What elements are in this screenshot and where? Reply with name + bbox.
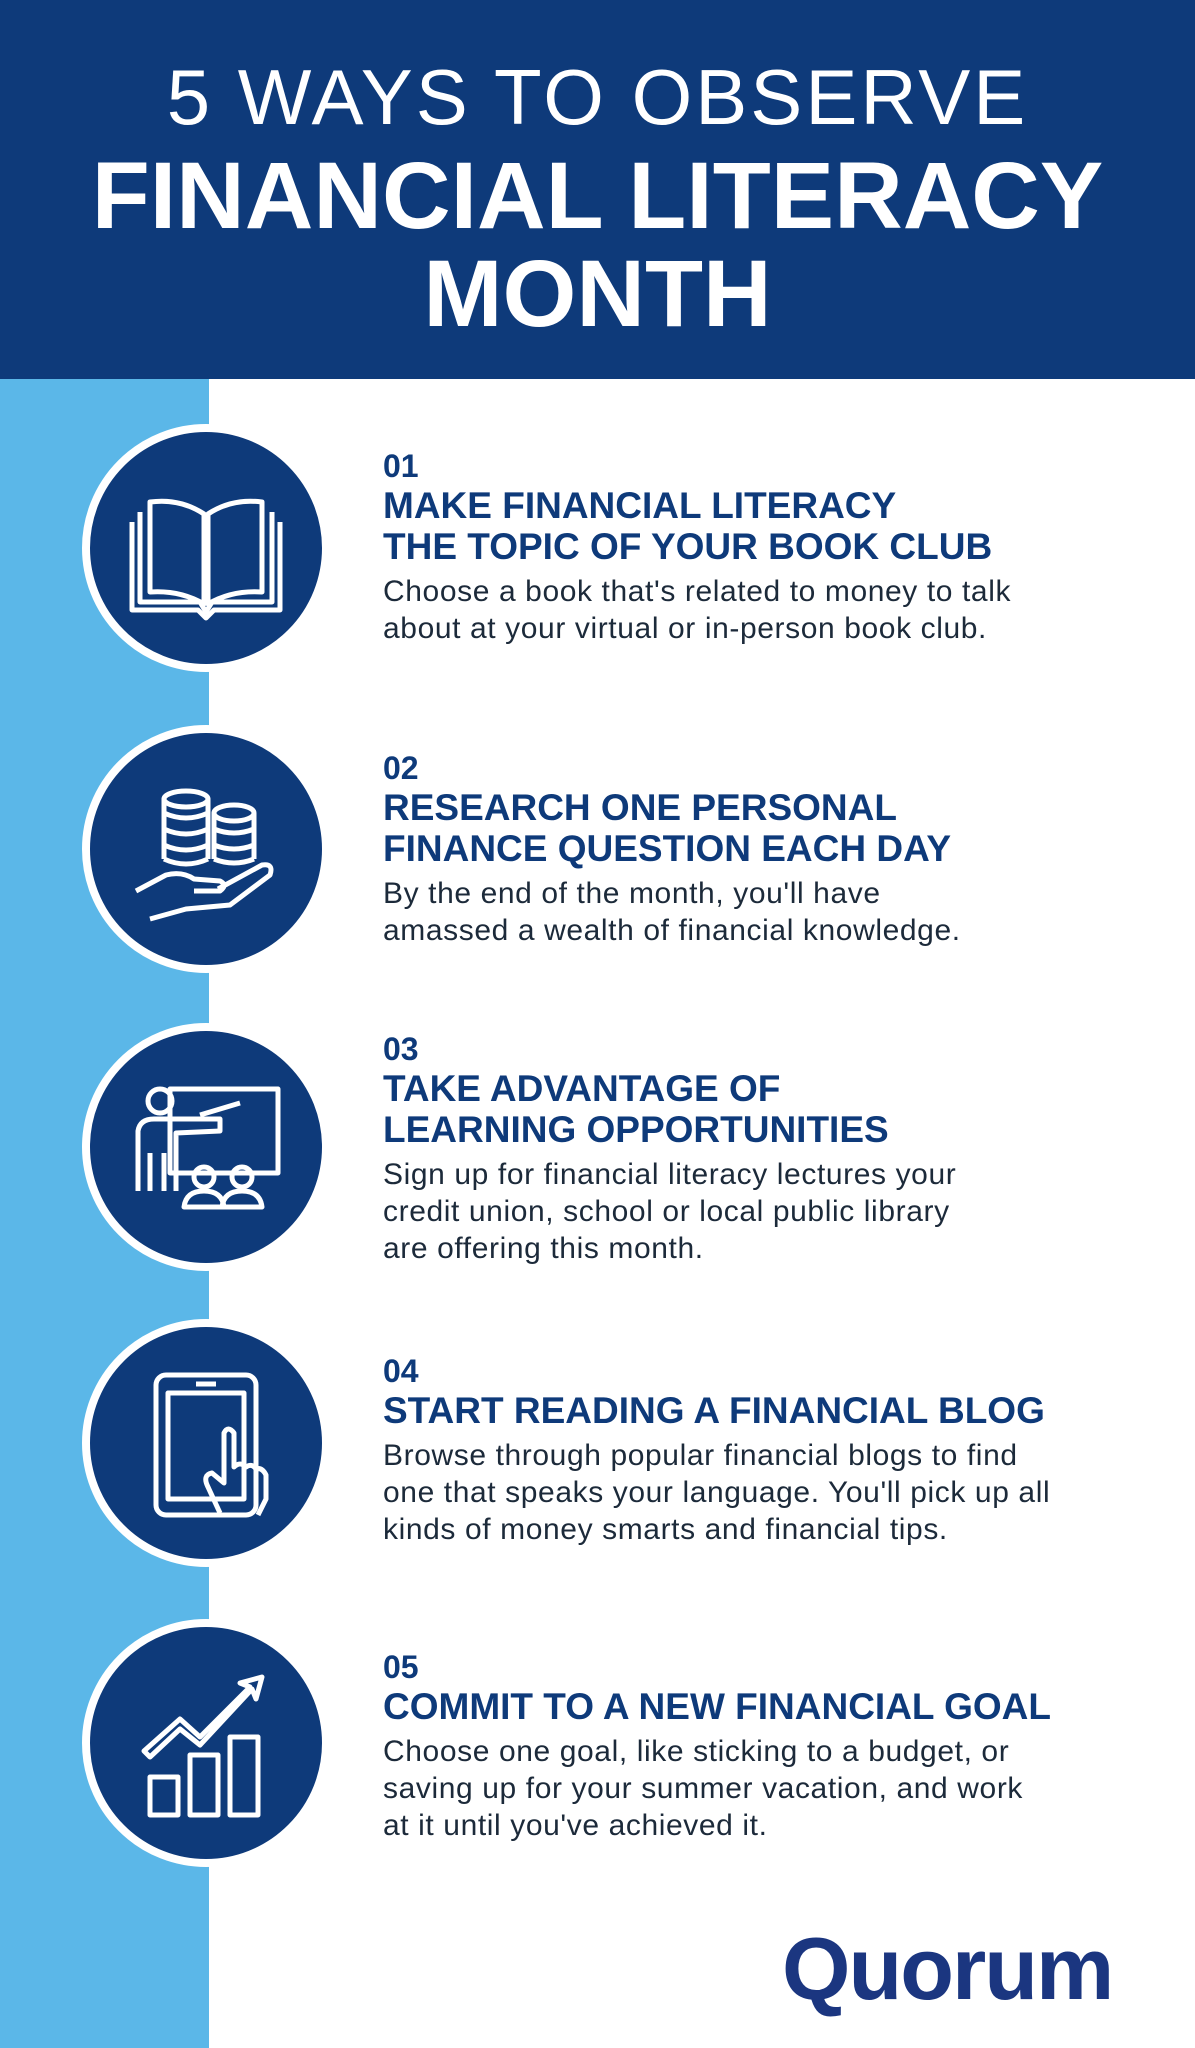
- item 02: RESEARCH ONE PERSONAL: [383, 787, 897, 828]
- item 03: Sign up for financial literacy lectures your: [383, 1158, 956, 1191]
- item 05: at it until you've achieved it.: [383, 1809, 768, 1842]
- item 04: kinds of money smarts and financial tips.: [383, 1513, 948, 1546]
- item 03: are offering this month.: [383, 1232, 704, 1265]
- item 01: [383, 448, 1011, 645]
- item 01: THE TOPIC OF YOUR BOOK CLUB: [383, 526, 992, 567]
- item 02: 02: [383, 750, 419, 786]
- item 04: 04: [383, 1353, 419, 1389]
- header: [0, 0, 1195, 379]
- item 01: Choose a book that's related to money to talk: [383, 575, 1011, 608]
- item 03: TAKE ADVANTAGE OF: [383, 1068, 780, 1109]
- item 03: [383, 1031, 956, 1265]
- item 05: [383, 1649, 1051, 1842]
- icon: teacher: [82, 1023, 330, 1271]
- title line 1: 5 WAYS TO OBSERVE: [167, 53, 1028, 141]
- item 02: [383, 750, 961, 947]
- item 02: amassed a wealth of financial knowledge.: [383, 914, 961, 947]
- icon: tablet touch: [82, 1319, 330, 1567]
- item 05: 05: [383, 1649, 419, 1685]
- title line 2: FINANCIAL LITERACY: [92, 143, 1103, 249]
- item 02: By the end of the month, you'll have: [383, 877, 881, 910]
- item 05: saving up for your summer vacation, and work: [383, 1772, 1023, 1805]
- logo: Quorum: [782, 1919, 1112, 2018]
- item 04: START READING A FINANCIAL BLOG: [383, 1390, 1045, 1431]
- item 04: [383, 1353, 1050, 1546]
- item 04: one that speaks your language. You'll pick up all: [383, 1476, 1050, 1509]
- item 04: Browse through popular financial blogs to find: [383, 1439, 1018, 1472]
- item 05: Choose one goal, like sticking to a budget, or: [383, 1735, 1009, 1768]
- item 03: LEARNING OPPORTUNITIES: [383, 1109, 889, 1150]
- item 02: FINANCE QUESTION EACH DAY: [383, 828, 951, 869]
- item 05: COMMIT TO A NEW FINANCIAL GOAL: [383, 1686, 1051, 1727]
- title line 3: MONTH: [423, 241, 772, 347]
- item 01: 01: [383, 448, 419, 484]
- item 01: about at your virtual or in-person book club.: [383, 612, 987, 645]
- item 03: credit union, school or local public library: [383, 1195, 950, 1228]
- item 01: MAKE FINANCIAL LITERACY: [383, 485, 896, 526]
- icon: book: [82, 424, 330, 672]
- left strip: [0, 379, 209, 2048]
- icon: growth chart: [82, 1619, 330, 1867]
- icon: coins in hand: [82, 725, 330, 973]
- item 03: 03: [383, 1031, 419, 1067]
